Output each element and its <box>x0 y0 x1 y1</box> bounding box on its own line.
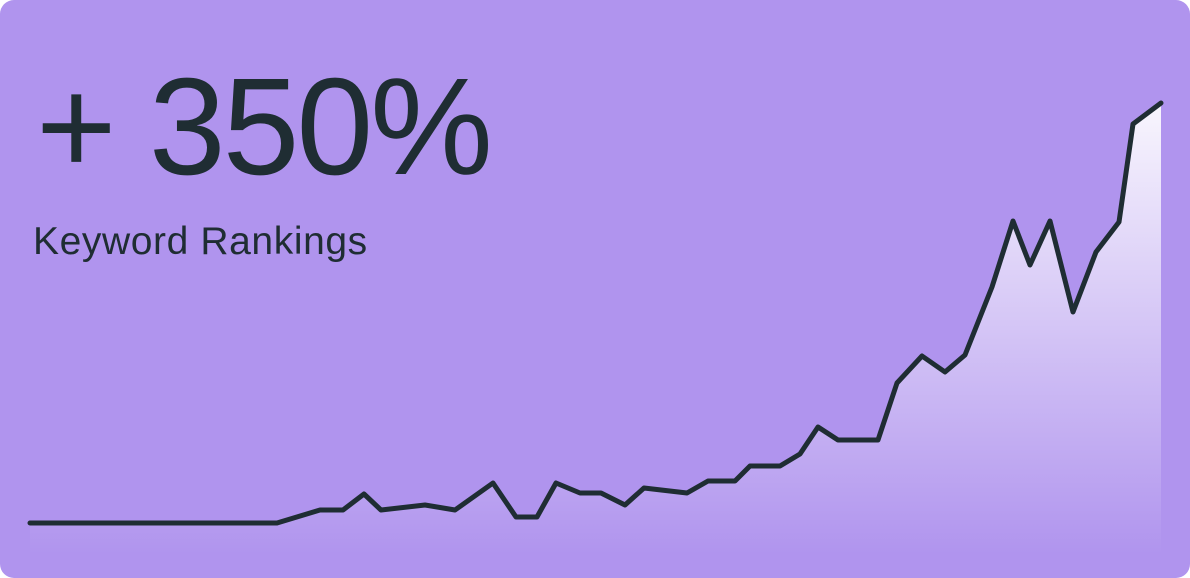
subtitle: Keyword Rankings <box>33 220 368 263</box>
headline number: + 350% <box>36 50 490 204</box>
trend line <box>30 103 1161 523</box>
area fill <box>30 103 1161 555</box>
